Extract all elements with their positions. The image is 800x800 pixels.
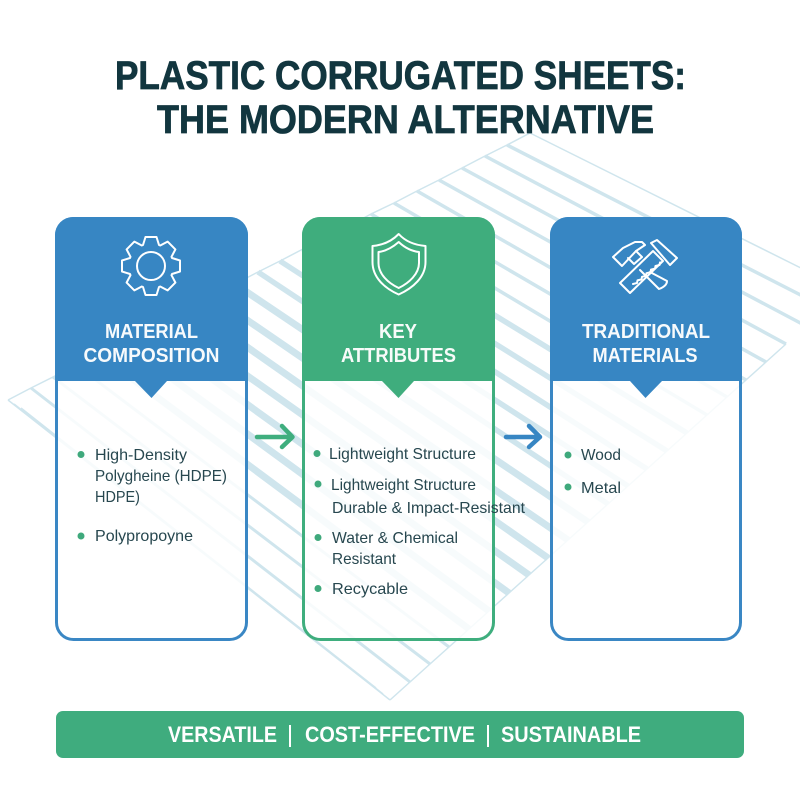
list: materials: Polygheine (HDPE) (95, 468, 227, 485)
title: PLASTIC CORRUGATED SHEETS: (115, 54, 686, 98)
list: materials: Polypropoyne (95, 528, 193, 545)
heading: key attributes (341, 320, 456, 367)
title (115, 54, 686, 142)
arrow: blue (506, 426, 540, 447)
title: THE MODERN ALTERNATIVE (157, 98, 654, 142)
list: attributes: Durable & Impact-Resistant (332, 500, 526, 517)
list: attributes: Lightweight Structure (331, 477, 476, 494)
list: attributes: Resistant (332, 551, 397, 568)
list: attributes: Recycable (332, 581, 408, 598)
list: traditional: Wood (581, 447, 621, 464)
list: attributes: Lightweight Structure (329, 446, 476, 463)
list: traditional: Metal (581, 480, 621, 497)
panel: key attributes (302, 217, 526, 640)
icon: gear (122, 237, 180, 295)
list: materials: HDPE) (95, 489, 140, 506)
heading: traditional materials: MATERIALS (592, 344, 698, 367)
heading: key attributes: ATTRIBUTES (341, 344, 456, 367)
panel: material composition (55, 217, 248, 640)
list: traditional (564, 447, 621, 497)
arrow: green (257, 426, 292, 447)
heading: material composition (84, 320, 220, 367)
banner: summary: COST-EFFECTIVE (305, 722, 475, 747)
heading: traditional materials: TRADITIONAL (582, 320, 710, 343)
heading: traditional materials (582, 320, 710, 367)
banner: summary: VERSATILE (168, 722, 277, 747)
icon: hammer and saw (613, 240, 677, 293)
list: attributes (314, 446, 526, 598)
icon: shield (372, 234, 426, 294)
banner: summary (56, 711, 744, 758)
heading: material composition: MATERIAL (105, 320, 198, 343)
list: attributes: Water & Chemical (332, 530, 458, 547)
heading: material composition: COMPOSITION (84, 344, 220, 367)
list: materials: High-Density (95, 447, 187, 464)
background: corrugated sheet illustration (8, 133, 800, 700)
list: materials (78, 447, 227, 545)
heading: key attributes: KEY (379, 320, 417, 343)
panel: traditional materials (550, 217, 742, 640)
banner: summary: SUSTAINABLE (501, 722, 641, 747)
